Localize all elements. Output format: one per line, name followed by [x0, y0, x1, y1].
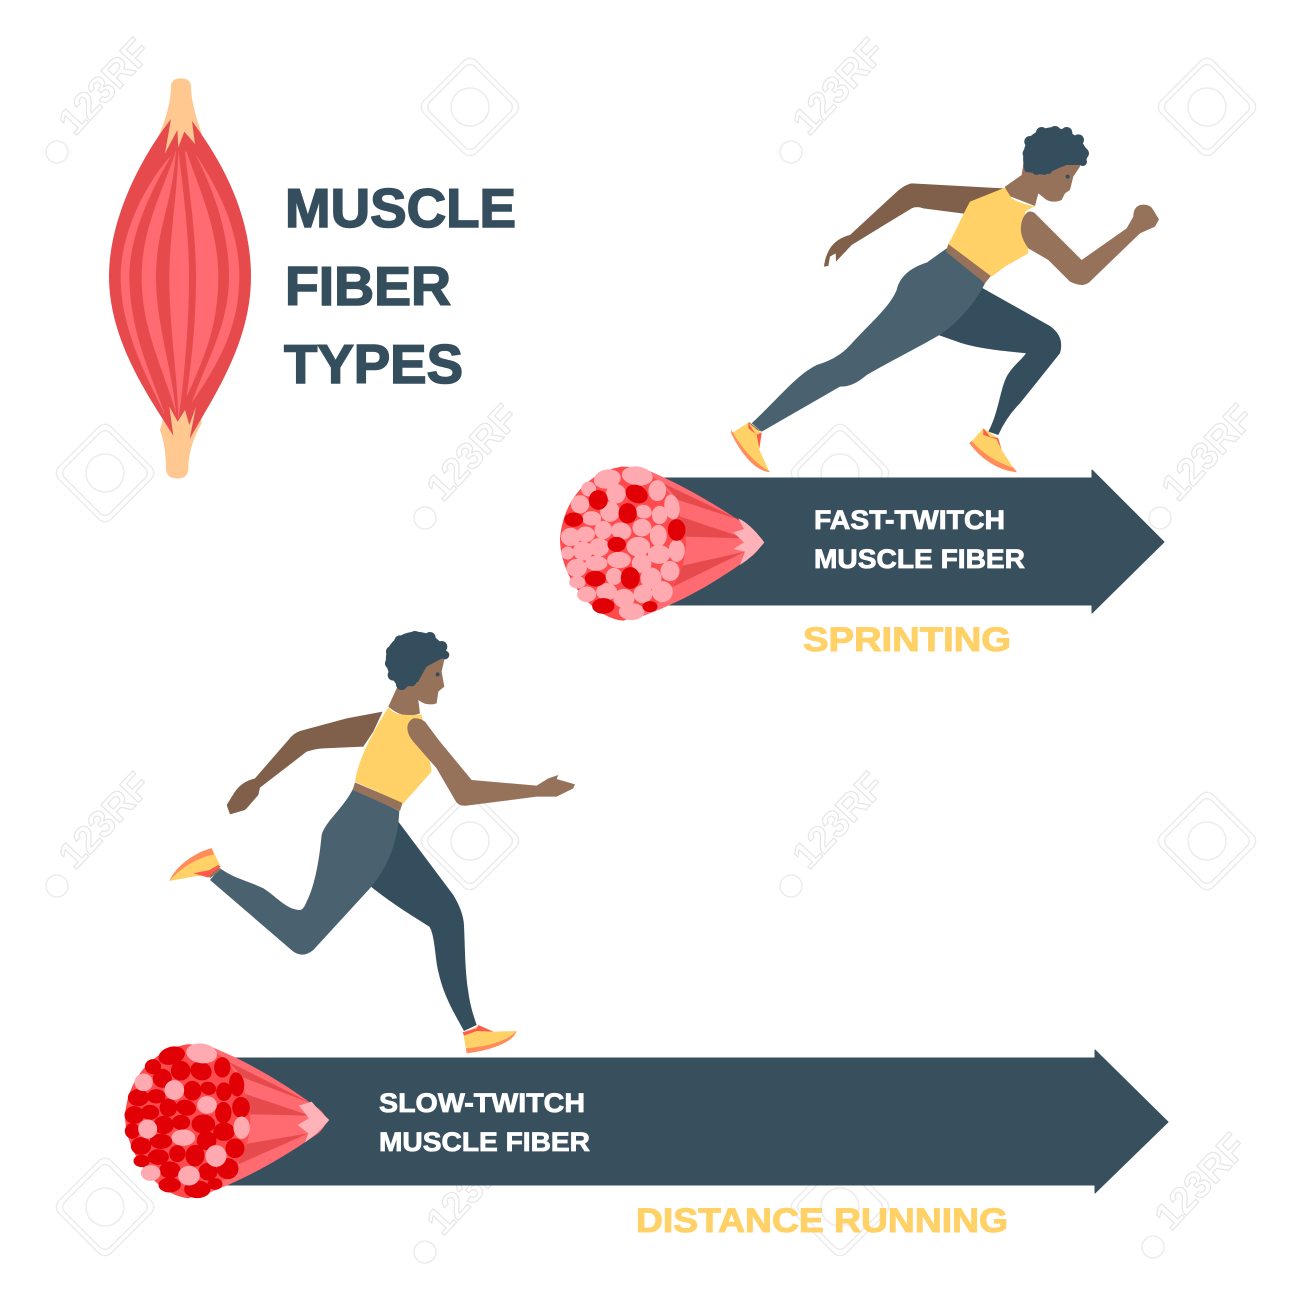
label: slow-twitch muscle fiber: MUSCLE FIBER: [379, 1127, 590, 1157]
label: fast-twitch muscle fiber: [814, 505, 1025, 574]
label: fast-twitch muscle fiber: FAST-TWITCH: [814, 505, 1005, 535]
arrow: fast-twitch: [660, 470, 1164, 613]
title: MUSCLE: [285, 177, 516, 239]
watermark text: 123RF: [1147, 1126, 1255, 1238]
icon: fast-twitch fiber bundle: [560, 465, 764, 621]
arrow: slow-twitch: [225, 1050, 1168, 1193]
label: slow-twitch muscle fiber: SLOW-TWITCH: [379, 1088, 585, 1118]
title: [284, 177, 516, 395]
label: slow-twitch muscle fiber: [379, 1088, 590, 1157]
watermark text: 123RF: [419, 1131, 527, 1243]
watermark text: 123RF: [785, 31, 893, 143]
figure: distance runner: [169, 631, 575, 1053]
title: FIBER: [285, 255, 451, 317]
label: fast-twitch muscle fiber: MUSCLE FIBER: [814, 544, 1025, 574]
watermark text: 123RF: [419, 397, 527, 509]
label: sprinting: SPRINTING: [803, 621, 1011, 659]
figure: sprinter: [732, 126, 1159, 472]
watermark text: 123RF: [785, 765, 893, 877]
title: TYPES: [284, 333, 463, 395]
watermark text: 123RF: [1154, 397, 1262, 509]
label: distance running: DISTANCE RUNNING: [636, 1202, 1008, 1240]
watermark text: 123RF: [51, 765, 159, 877]
icon: muscle: [109, 78, 251, 479]
watermark text: 123RF: [51, 31, 159, 143]
icon: slow-twitch fiber bundle: [125, 1042, 329, 1198]
